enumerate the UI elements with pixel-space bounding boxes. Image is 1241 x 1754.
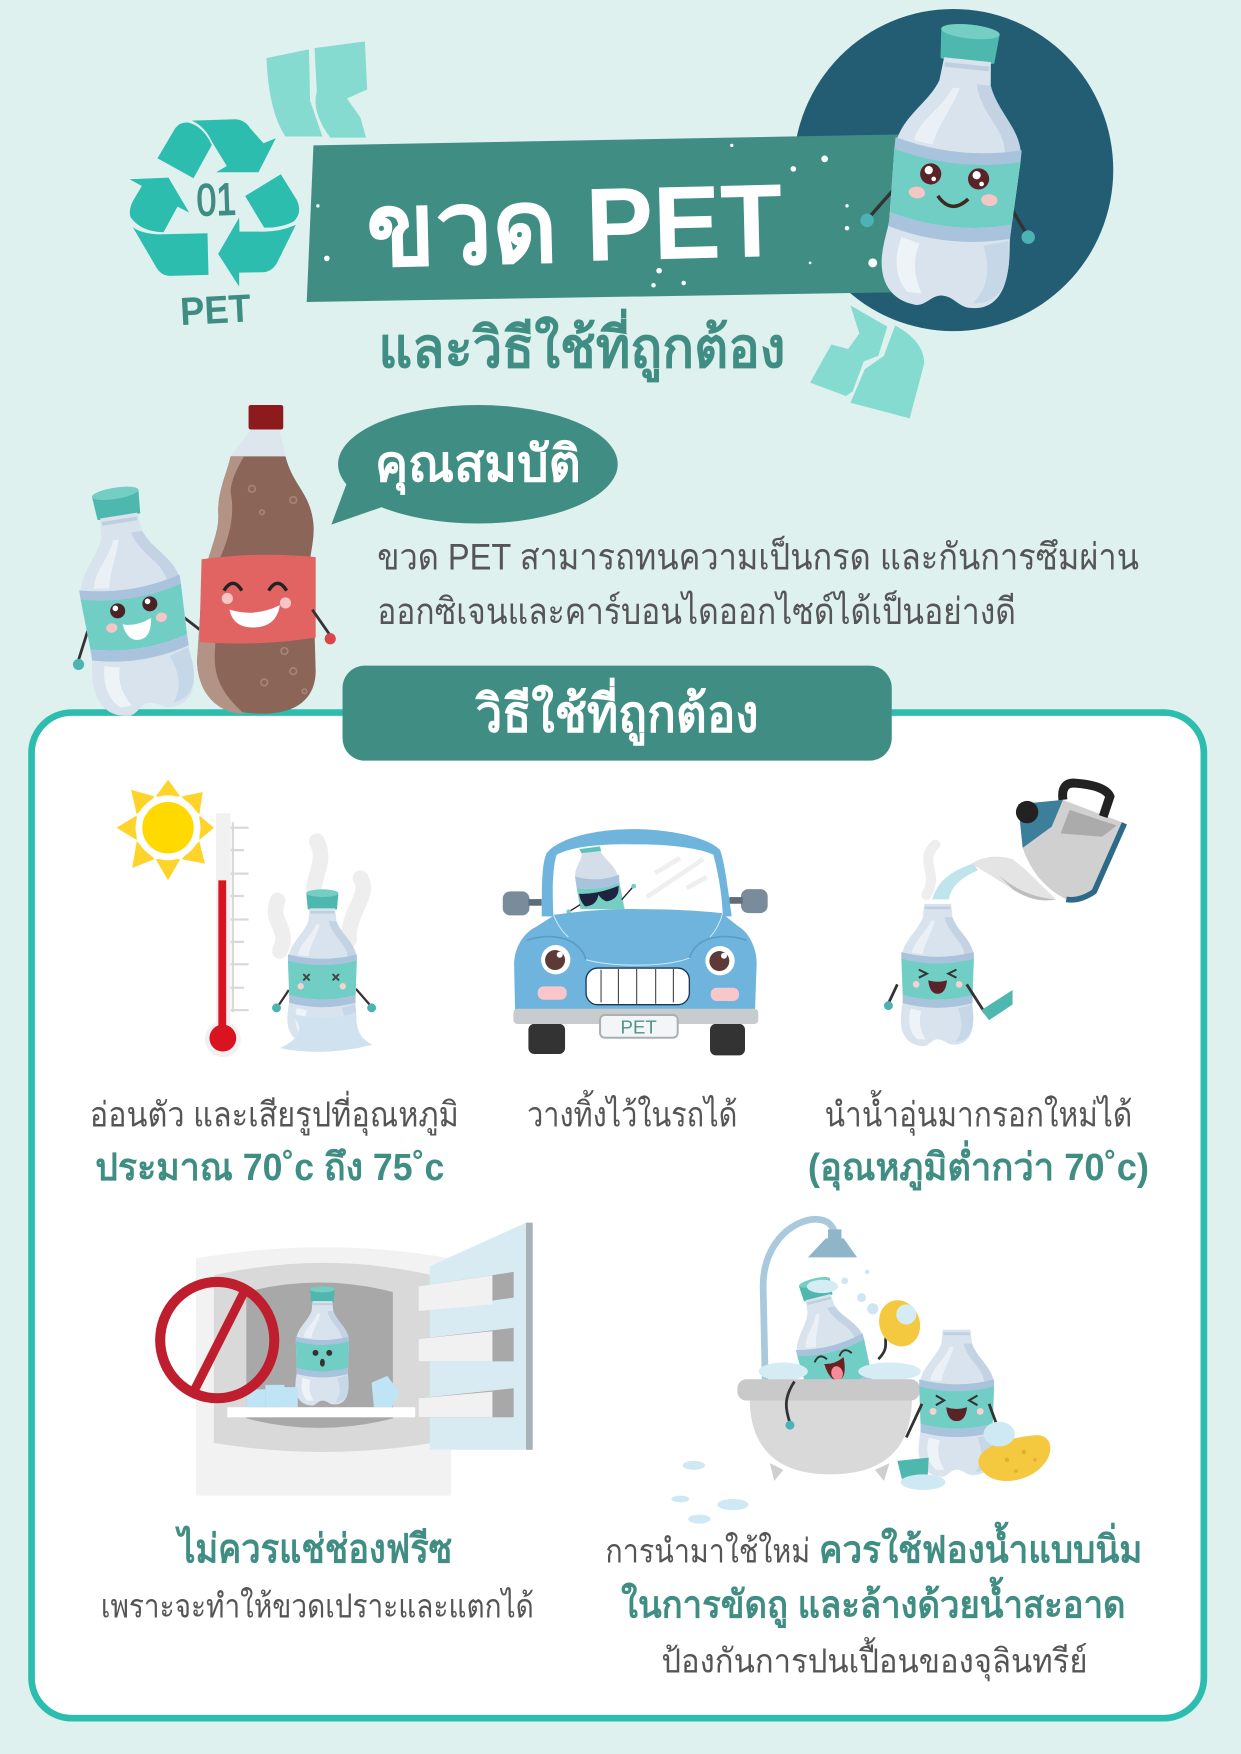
- icon: cola bottle mascot: [197, 405, 336, 714]
- text block: properties: ออกซิเจนและคาร์บอนไดออกไซด์ได้เป็นอย่างดี: [377, 589, 1016, 632]
- panel: usage: [32, 713, 1204, 1718]
- icon: sun: [117, 780, 214, 880]
- text: softens at temperature: อ่อนตัว และเสียรูปที่อุณหภูมิ: [90, 1090, 459, 1135]
- text: reuse advice: ป้องกันการปนเปื้อนของจุลินทรีย์: [661, 1636, 1088, 1681]
- icon: thermometer: [205, 813, 249, 1057]
- icon: freezer with bottle: [160, 1223, 533, 1496]
- text: do not freeze: เพราะจะทำให้ขวดเปราะและแตกได้: [101, 1587, 534, 1626]
- text: reuse advice: ในการขัดถู และล้างด้วยน้ำสะอาด: [621, 1577, 1126, 1629]
- heading: วิธีใช้ที่ถูกต้อง: วิธีใช้ที่ถูกต้อง: [475, 678, 759, 747]
- speech bubble: คุณสมบัติ: [331, 405, 618, 525]
- text: reuse advice: ควรใช้ฟองน้ำแบบนิ่ม: [819, 1522, 1142, 1572]
- title banner: [307, 134, 912, 302]
- icon: water bottle mascot: [63, 480, 214, 721]
- icon: melted bottle: [272, 841, 376, 1052]
- text: do not freeze: ไม่ควรแช่ช่องฟรีซ: [175, 1526, 452, 1572]
- speech bubble: คุณสมบัติ: คุณสมบัติ: [375, 435, 581, 495]
- text: do not freeze: [101, 1526, 534, 1626]
- text: softens at temperature: ประมาณ 70˚c ถึง 75˚c: [95, 1147, 444, 1189]
- title: ขวด PET: ขวด PET: [365, 163, 784, 289]
- icon: smiling car: [503, 829, 768, 1055]
- text: refill warm water: (อุณหภูมิต่ำกว่า 70˚c): [808, 1140, 1149, 1191]
- heading: วิธีใช้ที่ถูกต้อง: [343, 666, 892, 761]
- icon: recycle symbol with 01 and PET: [130, 119, 299, 334]
- icon: bottom quotation mark: [810, 305, 924, 418]
- text: refill warm water: [808, 1089, 1149, 1191]
- panel: dark circle behind bottle: [793, 9, 1113, 331]
- text: reuse advice: การนำมาใช้ใหม่: [605, 1532, 810, 1571]
- icon: bath with bottles: [671, 1219, 1050, 1524]
- text block: properties: [377, 534, 1139, 632]
- text: refill warm water: นำน้ำอุ่นมากรอกใหม่ได้: [825, 1089, 1132, 1135]
- text: reuse advice: [605, 1522, 1142, 1681]
- text: softens at temperature: [90, 1090, 459, 1189]
- icon: mascot bottle: [860, 18, 1035, 314]
- icon: recycle symbol with 01 and PET: 01: [196, 173, 237, 226]
- icon: top quotation mark: [266, 41, 367, 138]
- subtitle: และวิธีใช้ที่ถูกต้อง: [378, 308, 785, 383]
- text: can leave in car: วางทิ้งไว้ในรถได้: [527, 1089, 737, 1134]
- text block: properties: ขวด PET สามารถทนความเป็นกรด และกันการซึมผ่าน: [377, 534, 1139, 577]
- text: plate PET: PET: [621, 1017, 657, 1038]
- icon: recycle symbol with 01 and PET: PET: [179, 286, 252, 334]
- icon: kettle pouring into bottle: [884, 783, 1124, 1046]
